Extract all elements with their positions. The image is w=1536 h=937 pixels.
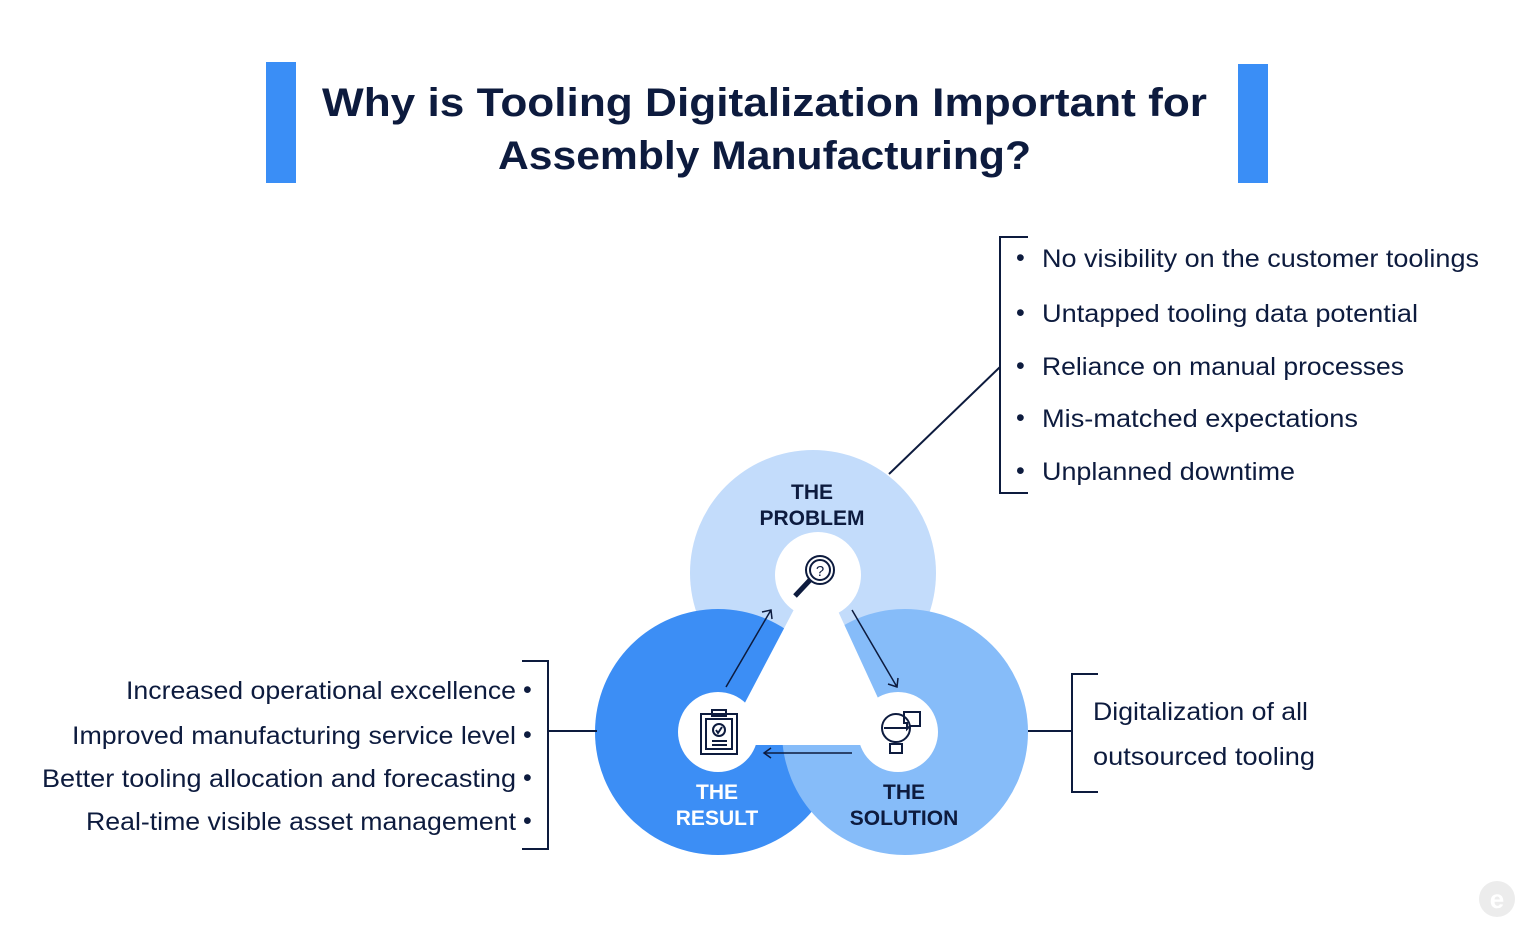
label: the solution: THE xyxy=(883,781,925,804)
problem list: • xyxy=(1016,352,1025,380)
connectors xyxy=(522,237,1098,849)
problem list: • xyxy=(1016,404,1025,432)
label: the solution: SOLUTION xyxy=(850,807,958,830)
result list: • xyxy=(523,676,532,704)
solution text: outsourced tooling xyxy=(1093,743,1315,771)
problem list: Unplanned downtime xyxy=(1042,458,1295,486)
icon: magnifier: ? xyxy=(816,563,824,580)
result list: Increased operational excellence xyxy=(126,677,516,705)
solution text: Digitalization of all xyxy=(1093,698,1308,726)
problem list: • xyxy=(1016,244,1025,272)
problem list: No visibility on the customer toolings xyxy=(1042,245,1479,273)
problem list: Mis-matched expectations xyxy=(1042,405,1358,433)
label: the result: THE xyxy=(696,781,738,804)
result list: Real-time visible asset management xyxy=(86,808,516,836)
title bar left xyxy=(266,62,296,183)
title bar right xyxy=(1238,64,1268,183)
label: the result xyxy=(676,781,758,830)
label: the problem xyxy=(760,481,864,530)
label: the problem: PROBLEM xyxy=(760,507,864,530)
arrows xyxy=(726,610,898,758)
title: Why is Tooling Digitalization Important for xyxy=(322,81,1207,125)
problem list xyxy=(1016,244,1479,486)
title xyxy=(322,81,1207,178)
title: Assembly Manufacturing? xyxy=(498,134,1031,178)
solution text xyxy=(1093,698,1315,771)
result list: Improved manufacturing service level xyxy=(72,722,516,750)
result list: Better tooling allocation and forecasting xyxy=(42,765,516,793)
problem list: Reliance on manual processes xyxy=(1042,353,1404,381)
result list: • xyxy=(523,807,532,835)
diagram xyxy=(595,450,1028,855)
problem list: Untapped tooling data potential xyxy=(1042,300,1418,328)
problem list: • xyxy=(1016,299,1025,327)
icon: magnifier xyxy=(795,556,834,596)
icon: bulb puzzle xyxy=(882,712,920,753)
result list: • xyxy=(523,721,532,749)
label: the problem: THE xyxy=(791,481,833,504)
problem list: • xyxy=(1016,457,1025,485)
logo xyxy=(1479,881,1515,917)
logo: e xyxy=(1490,884,1504,914)
icon: clipboard xyxy=(701,710,737,754)
label: the solution xyxy=(850,781,958,830)
label: the result: RESULT xyxy=(676,807,758,830)
result list xyxy=(42,676,532,836)
result list: • xyxy=(523,764,532,792)
